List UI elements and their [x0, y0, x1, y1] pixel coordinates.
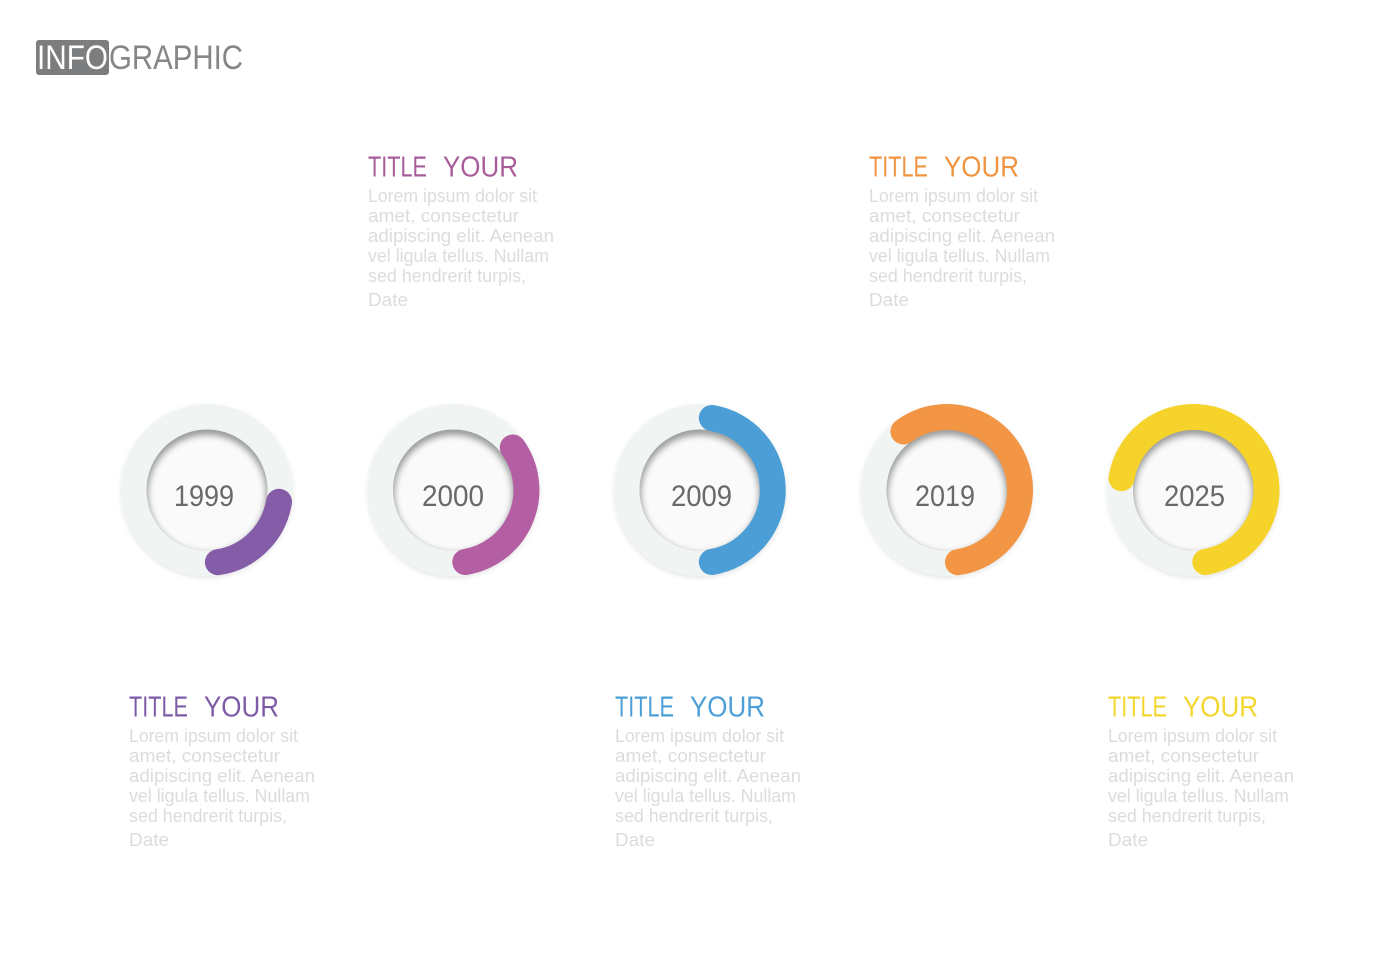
title: INFO — [37, 39, 108, 77]
progress ring: 2025 — [1108, 404, 1280, 576]
text block: 2009: Date — [615, 830, 655, 850]
text block: 2025: adipiscing elit. Aenean — [1108, 766, 1294, 786]
text block: 2019: TITLE — [869, 152, 928, 184]
text block: 2019: Lorem ipsum dolor sit — [869, 186, 1038, 206]
title — [36, 39, 243, 77]
progress ring: 1999: 1999 — [174, 480, 234, 513]
text block: 2000: Date — [368, 290, 408, 310]
text block: 2009: amet, consectetur — [615, 746, 766, 766]
text block: 2025 — [1108, 692, 1294, 850]
text block: 2025: TITLE — [1108, 692, 1167, 724]
text block: 2000: sed hendrerit turpis, — [368, 266, 526, 286]
progress ring: 1999 — [121, 404, 293, 576]
text block: 2019: vel ligula tellus. Nullam — [869, 246, 1050, 266]
text block: 2025: Lorem ipsum dolor sit — [1108, 726, 1277, 746]
text block: 1999 — [129, 692, 315, 850]
text block: 2000 — [368, 152, 554, 310]
text block: 2019: sed hendrerit turpis, — [869, 266, 1027, 286]
title: GRAPHIC — [109, 39, 243, 77]
text block: 2009: adipiscing elit. Aenean — [615, 766, 801, 786]
progress ring: 2000: 2000 — [422, 480, 484, 513]
text block: 2000: vel ligula tellus. Nullam — [368, 246, 549, 266]
text block: 2009: vel ligula tellus. Nullam — [615, 786, 796, 806]
progress ring: 2019 — [861, 404, 1033, 576]
text block: 2019: Date — [869, 290, 909, 310]
text block: 1999: adipiscing elit. Aenean — [129, 766, 315, 786]
progress ring: 2019: 2019 — [915, 480, 975, 513]
text block: 2009: YOUR — [690, 692, 765, 724]
text block: 2025: amet, consectetur — [1108, 746, 1259, 766]
progress ring: 2000 — [368, 404, 540, 576]
progress ring: 2025: 2025 — [1164, 480, 1225, 513]
text block: 2009: TITLE — [615, 692, 674, 724]
progress ring: 2009: 2009 — [671, 480, 732, 513]
text block: 2019 — [869, 152, 1055, 310]
text block: 2019: YOUR — [944, 152, 1019, 184]
text block: 2000: YOUR — [443, 152, 518, 184]
text block: 2025: Date — [1108, 830, 1148, 850]
text block: 1999: amet, consectetur — [129, 746, 280, 766]
text block: 1999: YOUR — [204, 692, 279, 724]
text block: 2000: TITLE — [368, 152, 427, 184]
text block: 1999: vel ligula tellus. Nullam — [129, 786, 310, 806]
text block: 1999: Lorem ipsum dolor sit — [129, 726, 298, 746]
text block: 2025: vel ligula tellus. Nullam — [1108, 786, 1289, 806]
text block: 2000: Lorem ipsum dolor sit — [368, 186, 537, 206]
text block: 1999: Date — [129, 830, 169, 850]
progress ring: 2009 — [614, 404, 786, 576]
text block: 2019: amet, consectetur — [869, 206, 1020, 226]
text block: 2009 — [615, 692, 801, 850]
text block: 2000: adipiscing elit. Aenean — [368, 226, 554, 246]
text block: 2009: sed hendrerit turpis, — [615, 806, 773, 826]
text block: 2019: adipiscing elit. Aenean — [869, 226, 1055, 246]
text block: 1999: TITLE — [129, 692, 188, 724]
text block: 2025: YOUR — [1183, 692, 1258, 724]
text block: 2000: amet, consectetur — [368, 206, 519, 226]
text block: 2009: Lorem ipsum dolor sit — [615, 726, 784, 746]
text block: 1999: sed hendrerit turpis, — [129, 806, 287, 826]
text block: 2025: sed hendrerit turpis, — [1108, 806, 1266, 826]
